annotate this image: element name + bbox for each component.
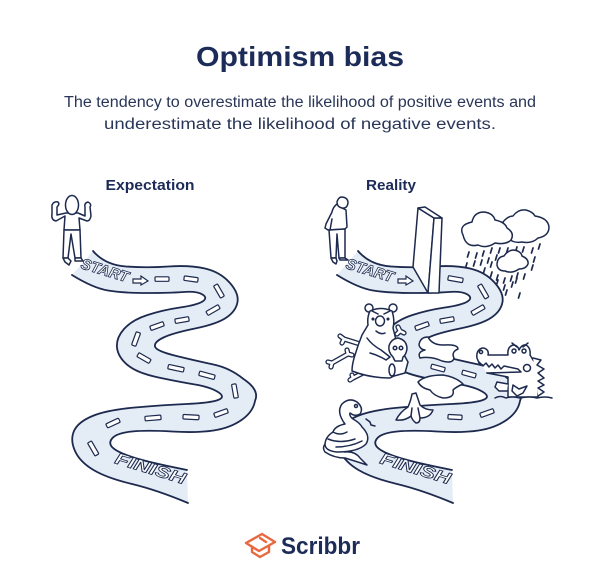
icon: puddle lower <box>418 375 463 398</box>
icon: snake <box>324 400 375 465</box>
icon: bones <box>328 327 404 380</box>
icon: sad person <box>325 197 348 264</box>
description text: underestimate the likelihood of negative events. <box>104 116 496 133</box>
road dashes <box>415 276 494 420</box>
icon: confident person <box>52 196 91 265</box>
skull <box>389 338 407 361</box>
rain <box>466 244 540 298</box>
heading: reality: Reality <box>366 178 416 194</box>
icon: rain clouds <box>462 210 549 272</box>
description text: The tendency to overestimate the likelihood of positive events and <box>64 94 536 111</box>
logo: scribbr <box>246 533 360 560</box>
start label: START <box>79 256 132 287</box>
icon: wall <box>413 207 442 293</box>
icon: bear <box>352 304 408 378</box>
description text <box>64 94 536 133</box>
panel: expectation road <box>72 251 256 503</box>
start arrow <box>398 276 413 285</box>
road dashes <box>88 276 238 456</box>
title: Optimism bias <box>196 41 404 72</box>
heading: expectation: Expectation <box>106 178 194 194</box>
wordmark: Scribbr <box>281 533 360 560</box>
icon: crocodile <box>477 343 552 398</box>
icon: graduation cap <box>246 534 275 557</box>
start arrow <box>133 276 148 285</box>
finish label: FINISH <box>378 451 453 488</box>
finish label: FINISH <box>113 451 188 488</box>
start label: START <box>344 256 397 287</box>
icon: puddle upper <box>419 337 458 362</box>
panel: reality road <box>337 244 540 503</box>
icon: banana peel <box>396 393 433 423</box>
